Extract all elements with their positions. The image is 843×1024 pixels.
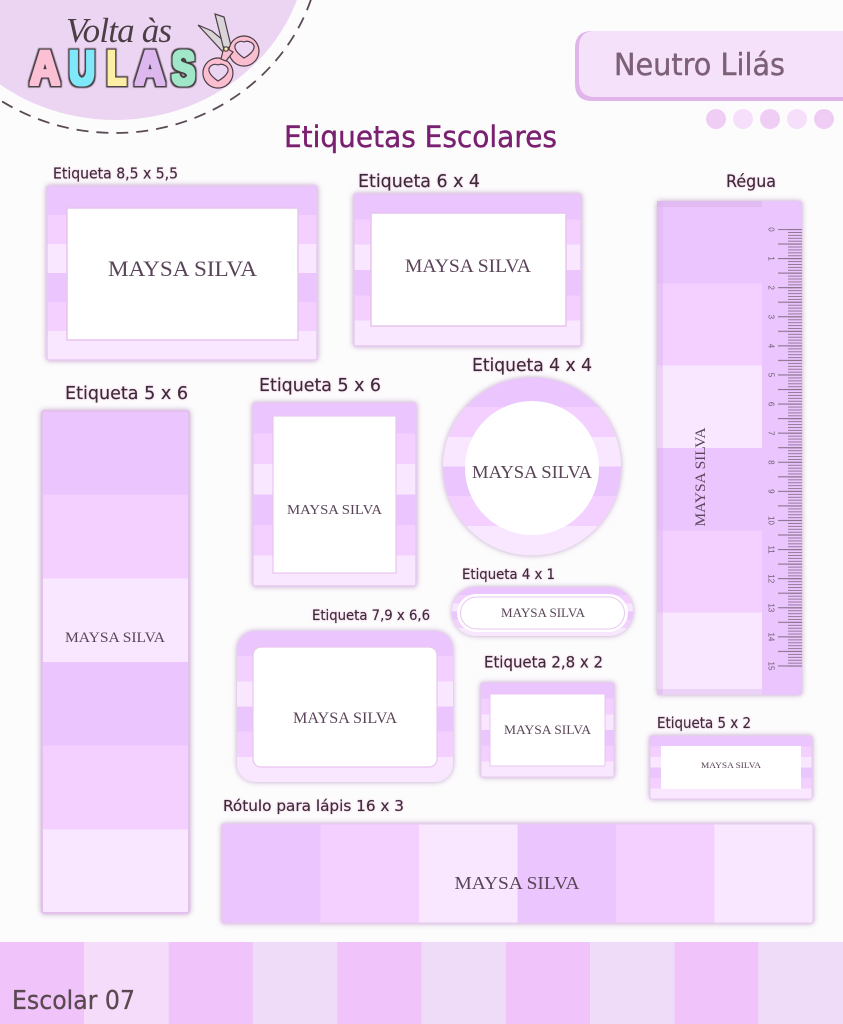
heading: Etiqueta 6 x 4: Etiqueta 6 x 4 [358,172,480,192]
ruler scale: 3 [766,315,776,320]
ruler scale: 14 [766,632,776,642]
label 6 x 4: MAYSA SILVA [405,257,532,277]
logo big word: S [172,42,195,96]
ruler scale: 10 [766,516,776,525]
title: Etiquetas Escolares [284,120,557,154]
label 7,9 x 6,6 rounded: MAYSA SILVA [293,710,397,727]
label 4 x 4 round: MAYSA SILVA [472,462,592,482]
label 4 x 1 pill: MAYSA SILVA [501,606,585,620]
palette dots [706,109,834,129]
label 5 x 2: MAYSA SILVA [701,760,762,770]
heading: Etiqueta 7,9 x 6,6: Etiqueta 7,9 x 6,6 [312,608,430,624]
heading: Etiqueta 5 x 6 centre: Etiqueta 5 x 6 [259,376,381,396]
logo big word [30,42,195,96]
heading: Etiqueta 4 x 1: Etiqueta 4 x 1 [462,567,555,583]
label 7,9 x 6,6 rounded [237,631,453,782]
ruler scale: 6 [766,402,776,407]
label 8,5 x 5,5 [47,186,317,360]
ruler scale: 2 [766,285,776,290]
logo big word: A [135,42,165,96]
label 5 x 6 tall [42,411,189,913]
label 5 x 6: MAYSA SILVA [287,503,383,518]
label 5 x 6 [253,403,416,586]
ruler scale: 7 [766,431,776,436]
theme name tab [575,31,843,101]
ruler: MAYSA SILVA [693,427,709,527]
footer code: Escolar 07 [12,986,135,1016]
ruler [657,201,802,695]
ruler scale: 0 [766,227,776,232]
logo big word: A [30,42,60,96]
ruler scale: 12 [766,574,776,584]
heading: Rótulo para lápis: Rótulo para lápis 16 x 3 [223,797,404,815]
dashed stitching [0,0,321,133]
icon: scissors [198,14,259,88]
ruler scale: 13 [766,603,776,613]
ruler scale: 8 [766,460,776,465]
label 8,5 x 5,5: MAYSA SILVA [108,256,257,281]
footer stripe band [0,942,843,1024]
ruler scale: 9 [766,489,776,494]
ruler scale: 1 [766,256,776,261]
label 4 x 1 pill [452,587,633,636]
header logo badge [0,0,321,133]
label 2,8 x 2: MAYSA SILVA [504,723,592,737]
heading: Etiqueta 2,8 x 2: Etiqueta 2,8 x 2 [484,652,603,672]
ruler scale: 5 [766,373,776,378]
label 5 x 2 [650,736,812,799]
label 6 x 4 [354,194,581,346]
ruler scale [766,227,802,671]
heading: Etiqueta 4 x 4: Etiqueta 4 x 4 [472,356,592,376]
heading: Etiqueta 5 x 2: Etiqueta 5 x 2 [657,714,751,732]
pencil label 16 x 3: MAYSA SILVA [454,873,580,893]
heading: Etiqueta 5 x 6 left: Etiqueta 5 x 6 [65,384,188,404]
ruler scale: 15 [766,662,776,671]
lilac header shape [0,0,308,120]
logo script text: Volta às [66,11,172,50]
heading: Régua: Régua [726,172,776,191]
label 2,8 x 2 [481,683,614,777]
heading: Etiqueta 8,5 x 5,5: Etiqueta 8,5 x 5,5 [53,164,178,182]
logo big word: L [107,42,126,96]
logo big word: U [69,42,95,96]
label 4 x 4 round [443,378,621,556]
theme name tab: Neutro Lilás [614,48,785,83]
pencil label 16 x 3 [222,824,813,923]
ruler scale: 4 [766,344,776,349]
ruler scale: 11 [766,545,776,554]
label 5 x 6 tall: MAYSA SILVA [65,630,165,646]
